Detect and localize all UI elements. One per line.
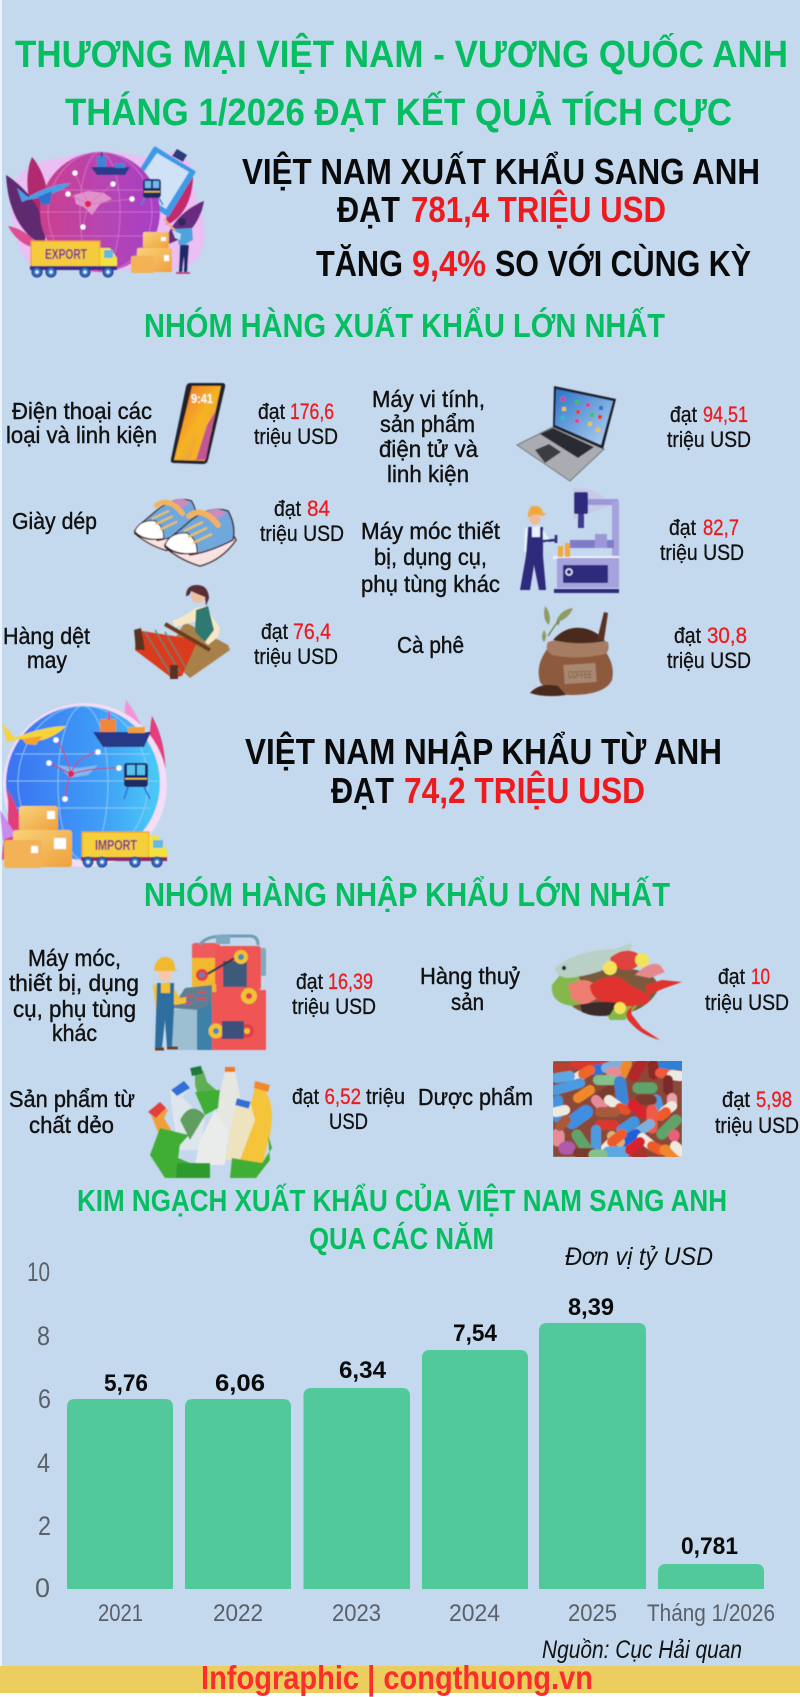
unit note: Đơn vị tỷ USD [565,1243,713,1271]
icon: worker at CNC machine [520,488,619,593]
y axis labels: 6 [38,1384,51,1414]
panel: export item phones [6,383,338,464]
icon: colourful pills [553,1061,682,1157]
panel: export item machinery [361,488,744,597]
icon: recycled plastic bottles [148,1066,272,1178]
panel: import item machinery: triệu USD [292,994,376,1019]
icon: smartphone [171,383,225,464]
bar value labels: 6,06 [215,1370,265,1397]
panel: import item plastics: đạt [292,1084,319,1109]
icon: import globe illustration: IMPORT [95,837,137,854]
heading: largest export groups: NHÓM HÀNG XUẤT KHẨU LỚN NHẤT [144,307,665,344]
panel: export item textiles [3,585,338,679]
panel: export item footwear: Giày dép [12,508,97,534]
panel: export item textiles: đạt [261,619,288,644]
panel: export item phones: Điện thoại các [12,398,152,424]
x axis labels: 2024 [449,1600,500,1627]
y axis labels: 4 [37,1448,50,1478]
heading: chart title: QUA CÁC NĂM [309,1221,494,1256]
panel: import item pharmaceuticals: 5,98 [756,1087,792,1112]
y axis labels: 10 [27,1257,50,1287]
panel: import item machinery: Máy móc, [28,945,121,971]
panel: export item coffee: 30,8 [707,623,747,648]
x axis labels: 2021 [98,1600,143,1627]
icon: pair of sneakers [135,499,236,566]
panel: import item machinery: thiết bị, dụng [9,970,139,996]
panel: import item plastics: USD [329,1109,368,1134]
panel: export item machinery: phụ tùng khác [361,571,500,597]
panel: import item plastics: chất dẻo [29,1112,114,1138]
panel: export item phones: triệu USD [254,424,338,449]
bars [67,1323,764,1589]
heading: Vietnam export value: 781,4 TRIỆU USD [411,188,666,230]
panel: export item footwear: triệu USD [260,521,344,546]
panel: export item machinery: đạt [669,515,696,540]
icon: coffee sack: COFFEE [568,670,592,681]
panel: import item seafood: sản [451,989,484,1015]
panel: export item machinery: triệu USD [660,540,744,565]
heading: Vietnam import value: VIỆT NAM NHẬP KHẨU TỪ ANH [245,730,722,772]
panel: export item textiles: may [27,647,67,673]
bar value labels: 8,39 [568,1294,614,1321]
icon: import globe illustration [0,700,167,868]
panel: import item plastics [9,1066,405,1178]
panel: export item textiles: triệu USD [254,644,338,669]
panel: export item computers: 94,51 [703,402,748,427]
panel: export item computers [372,386,751,487]
panel: import item machinery [9,935,376,1050]
panel: import item seafood: Hàng thuỷ [420,963,520,989]
bar chart: export value by year [27,1257,775,1627]
heading: largest import groups: NHÓM HÀNG NHẬP KHẨU LỚN NHẤT [144,876,670,913]
panel: export item computers: điện tử và [379,436,478,462]
panel: import item pharmaceuticals [418,1061,799,1157]
heading: export growth [316,242,751,284]
panel: export item computers: linh kiện [387,461,469,487]
panel: import item machinery: 16,39 [328,969,373,994]
y axis labels: 8 [37,1321,50,1351]
icon: worker at industrial machine [153,935,266,1050]
x axis labels: 2025 [568,1600,617,1627]
panel: export item phones: loại và linh kiện [6,422,157,448]
heading: Vietnam import value [245,730,722,811]
panel: import item seafood [420,943,789,1040]
panel: export item machinery: Máy móc thiết [361,518,501,544]
heading: export growth: TĂNG [316,243,403,284]
icon: smartphone: 9:41 [191,391,213,406]
bar value labels: 7,54 [453,1320,498,1347]
icon: coffee sack [530,606,613,696]
panel: export item computers: đạt [670,402,697,427]
panel: import item plastics: Sản phẩm từ [9,1086,135,1112]
panel: import item machinery: đạt [296,969,323,994]
panel: export item footwear [12,496,344,566]
panel: export item coffee: đạt [674,623,701,648]
panel: export item coffee: triệu USD [667,648,751,673]
panel: export item machinery: bị, dụng cụ, [374,544,487,570]
panel: export item textiles: 76,4 [293,619,331,644]
footer banner [0,1659,800,1697]
bar value labels: 5,76 [104,1370,148,1397]
heading: Vietnam export value: ĐẠT [337,189,400,230]
title: THÁNG 1/2026 ĐẠT KẾT QUẢ TÍCH CỰC [65,90,732,134]
footer banner: Infographic | congthuong.vn [201,1659,593,1696]
panel: import item machinery: khác [52,1020,97,1046]
title [15,31,788,134]
panel: import item seafood: triệu USD [705,990,789,1015]
heading: export growth: 9,4% [412,243,486,284]
heading: Vietnam export value [242,150,760,230]
icon: export globe illustration: EXPORT [45,246,87,263]
panel: export item footwear: đạt [274,496,301,521]
heading: Vietnam import value: 74,2 TRIỆU USD [404,769,645,811]
panel: import item pharmaceuticals: Dược phẩm [418,1084,533,1110]
icon: seafood platter [552,943,682,1040]
heading: export growth: SO VỚI CÙNG KỲ [495,242,751,284]
bar value labels: 6,34 [339,1357,387,1384]
panel: import item machinery: cụ, phụ tùng [13,996,136,1022]
heading: chart title [77,1182,727,1256]
x axis labels: 2022 [213,1600,263,1627]
panel: export item coffee: Cà phê [397,632,464,658]
panel: import item plastics: 6,52 [324,1084,361,1109]
panel: import item pharmaceuticals: đạt [722,1087,750,1112]
icon: laptop [517,386,616,481]
panel: export item computers: sản phẩm [380,411,475,437]
bar value labels: 0,781 [681,1533,738,1560]
panel: export item phones: 176,6 [290,399,334,424]
icon: export globe illustration [6,148,204,277]
heading: Vietnam import value: ĐẠT [331,770,394,811]
panel: import item plastics: triệu [366,1084,405,1109]
y axis labels: 0 [35,1573,50,1603]
panel: export item computers: Máy vi tính, [372,386,485,412]
panel: import item seafood: 10 [751,964,770,989]
panel: export item coffee [397,606,751,696]
panel: export item footwear: 84 [307,496,330,521]
panel: export item textiles: Hàng dệt [3,623,91,649]
x axis labels: Tháng 1/2026 [647,1600,775,1627]
source note: Nguồn: Cục Hải quan [542,1636,742,1664]
panel: export item machinery: 82,7 [703,515,739,540]
x axis labels [98,1600,775,1627]
panel: export item phones: đạt [258,399,285,424]
panel: import item seafood: đạt [718,964,745,989]
y axis labels [27,1257,51,1603]
panel: export item computers: triệu USD [667,427,751,452]
bar value labels [104,1294,738,1560]
y axis labels: 2 [38,1511,51,1541]
icon: woman weaving at loom [134,585,230,679]
x axis labels: 2023 [332,1600,381,1627]
